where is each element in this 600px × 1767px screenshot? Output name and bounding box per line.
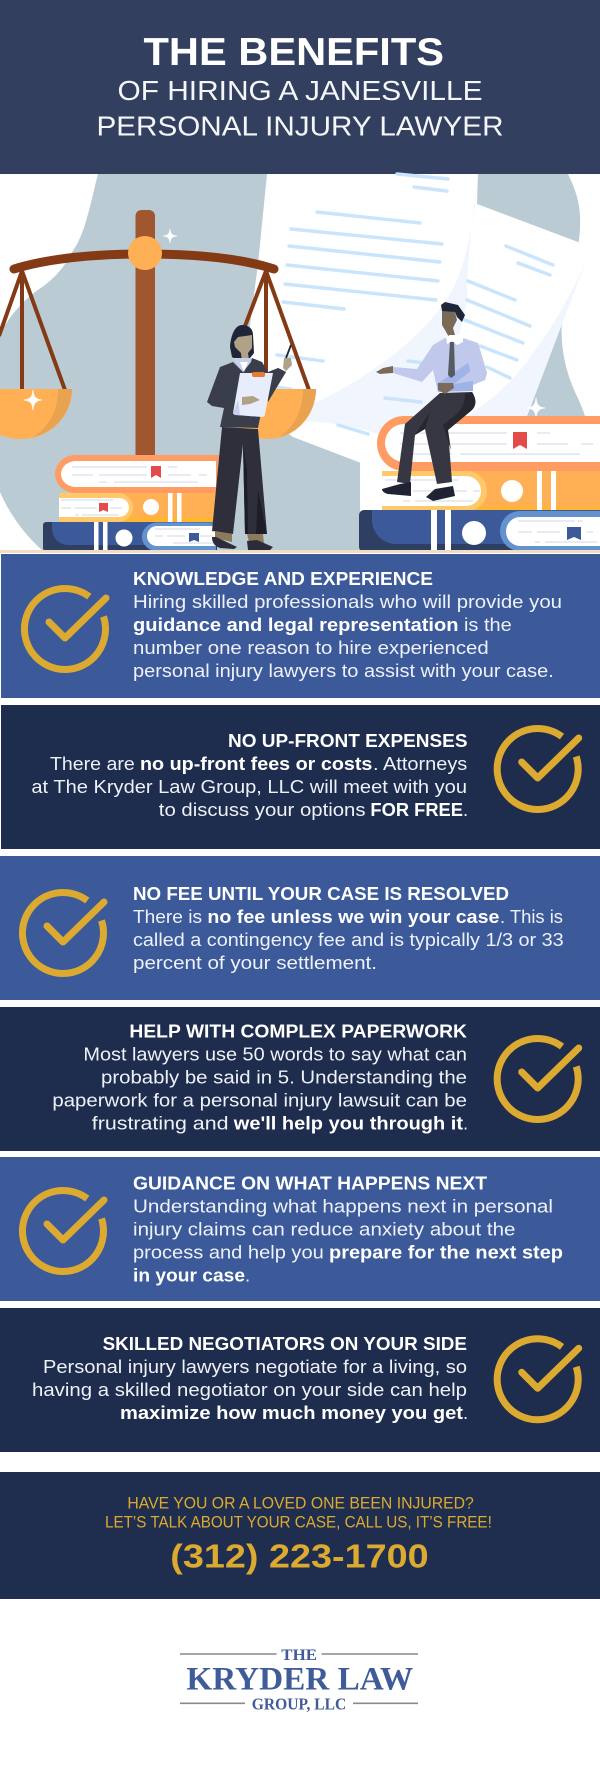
title: THE BENEFITS [144,31,444,74]
text: knowledge and experience: personal injury lawyers to assist with your case. [133,660,554,681]
text: skilled negotiators: SKILLED NEGOTIATORS ON YOUR SIDE [103,1333,467,1354]
icon: gold check circle [22,1190,104,1271]
text: skilled negotiators: maximize how much money you get [120,1402,463,1423]
text: help with complex paperwork: frustrating and [92,1112,228,1133]
text: no fee until resolved: . This is [500,906,563,927]
text: no fee until resolved: called a contingency fee and is typically 1/3 or 33 [133,929,564,950]
text: no up-front expenses: no up-front fees or costs [140,753,372,774]
logo: The Kryder Law Group: GROUP, LLC [252,1694,346,1713]
illustration: lawyers, scales and books [0,174,600,553]
sparkles [24,229,545,418]
title [96,31,504,142]
text: no up-front expenses: FOR FREE [370,799,463,820]
text: no up-front expenses: to discuss your options [159,799,366,820]
background blob [0,174,585,551]
text: no fee until resolved: percent of your settlement. [133,952,377,973]
right book stack [359,416,600,552]
logo: The Kryder Law Group: KRYDER LAW [186,1661,413,1697]
text: knowledge and experience: KNOWLEDGE AND EXPERIENCE [133,568,433,589]
text: knowledge and experience: guidance and legal representation [133,614,458,635]
panel: help with complex paperwork [0,1007,600,1151]
text: no up-front expenses: . Attorneys [373,753,467,774]
panel: no fee until resolved [0,856,600,1000]
icon: gold check circle [497,1339,579,1420]
logo: The Kryder Law Group [180,1647,418,1713]
text: guidance on what happens next: prepare for the next step [329,1241,563,1262]
text: no up-front expenses: at The Kryder Law Group, LLC will meet with you [31,776,467,797]
title: OF HIRING A JANESVILLE [118,75,483,106]
text: help with complex paperwork: paperwork for a personal injury lawsuit can be [52,1089,467,1110]
text: no fee until resolved: There is [133,906,202,927]
text: guidance on what happens next: Understanding what happens next in personal [133,1195,553,1216]
title: PERSONAL INJURY LAWYER [96,110,504,142]
text: guidance on what happens next: process and help you [133,1241,324,1262]
logo: The Kryder Law Group: THE [281,1647,317,1664]
icon: gold check circle [22,892,104,973]
woman with clipboard [207,325,292,550]
text: guidance on what happens next: GUIDANCE ON WHAT HAPPENS NEXT [133,1172,488,1193]
text: help with complex paperwork [52,1020,468,1133]
call to action text: HAVE YOU OR A LOVED ONE BEEN INJURED? [127,1494,474,1513]
icon: gold check circle [497,1038,579,1119]
text: no up-front expenses: NO UP-FRONT EXPENSES [228,730,468,751]
text: no up-front expenses [31,730,468,820]
man sitting on books [376,302,487,501]
text: guidance on what happens next: in your case [133,1264,245,1285]
paper sheets [240,174,590,471]
text: no fee until resolved [133,883,564,973]
floor strip [0,550,600,553]
left book stack [43,455,222,551]
panel: knowledge and experience [1,554,600,698]
text: no up-front expenses: There are [50,753,135,774]
text: skilled negotiators [32,1333,468,1423]
text: skilled negotiators: . [463,1402,468,1423]
text: guidance on what happens next: injury claims can reduce anxiety about the [133,1218,516,1239]
call to action panel [0,1472,600,1599]
phone number: (312) 223-1700 [170,1537,429,1574]
header banner [0,0,600,174]
panel: guidance on what happens next [0,1157,600,1301]
text: skilled negotiators: Personal injury lawyers negotiate for a living, so [43,1356,467,1377]
text: no fee until resolved: no fee unless we win your case [207,906,499,927]
text: knowledge and experience: is the [464,614,512,635]
icon: gold check circle [24,588,106,669]
text: knowledge and experience [133,568,562,681]
text: guidance on what happens next [133,1172,563,1285]
text: guidance on what happens next: . [245,1264,250,1285]
text: help with complex paperwork: HELP WITH COMPLEX PAPERWORK [129,1020,468,1041]
call to action text: LET’S TALK ABOUT YOUR CASE, CALL US, IT’S FREE! [105,1513,492,1532]
text: no up-front expenses: . [463,799,468,820]
call to action text [105,1494,492,1532]
text: no fee until resolved: NO FEE UNTIL YOUR CASE IS RESOLVED [133,883,509,904]
text: knowledge and experience: number one reason to hire experienced [133,637,489,658]
text: knowledge and experience: Hiring skilled professionals who will provide you [133,591,562,612]
panel: skilled negotiators [0,1308,600,1452]
panel: no up-front expenses [1,705,600,849]
text: help with complex paperwork: probably be said in 5. Understanding the [101,1066,467,1087]
icon: gold check circle [497,728,579,809]
text: help with complex paperwork: we'll help you through it [233,1112,463,1133]
scales of justice [0,210,316,460]
text: skilled negotiators: having a skilled negotiator on your side can help [32,1379,467,1400]
text: help with complex paperwork: Most lawyers use 50 words to say what can [83,1043,467,1064]
text: help with complex paperwork: . [463,1112,468,1133]
